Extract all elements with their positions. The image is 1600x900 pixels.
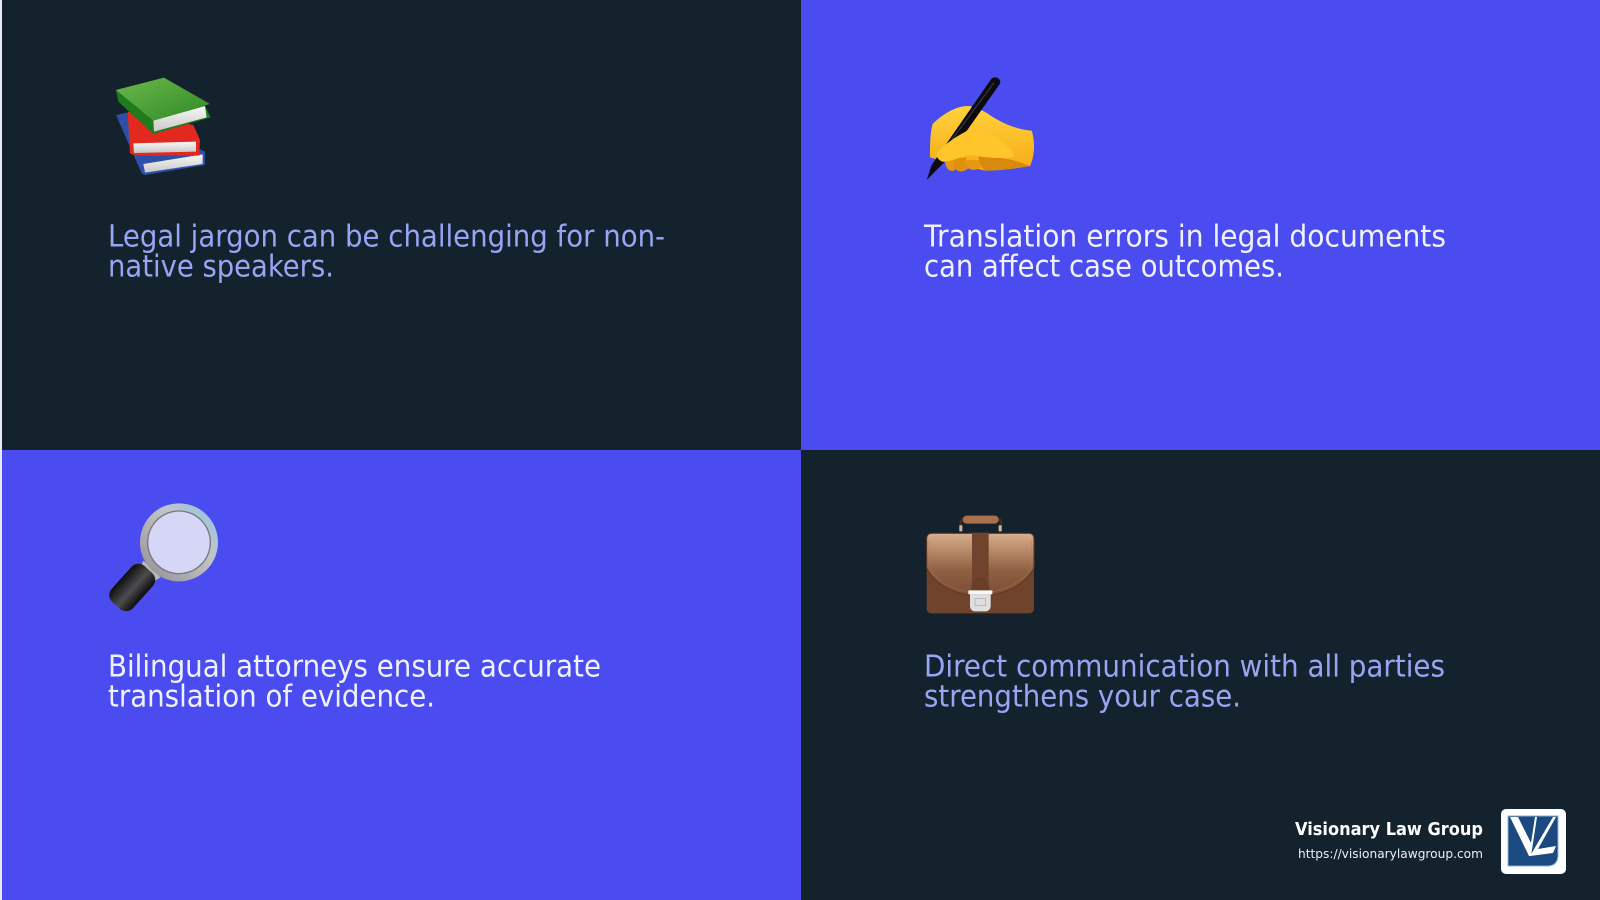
panel: bilingual attorneys: [2, 450, 801, 900]
icon: writing hand: [927, 77, 1034, 180]
left edge strip: [0, 0, 2, 900]
text: bilingual attorneys: [108, 649, 601, 714]
text: legal jargon: native speakers.: [108, 249, 334, 284]
brand name: Visionary Law Group: [1295, 819, 1483, 840]
panel: translation errors: [801, 0, 1600, 450]
text: direct communication: strengthens your case.: [924, 679, 1241, 714]
brand url: https://visionarylawgroup.com: [1298, 846, 1483, 861]
text: legal jargon: [108, 219, 665, 284]
text: translation errors: can affect case outcomes.: [924, 249, 1284, 284]
panel: legal jargon: [2, 0, 801, 450]
text: translation errors: Translation errors in legal documents: [923, 219, 1446, 254]
panel: direct communication: [801, 450, 1600, 900]
icon: briefcase: [927, 516, 1034, 613]
text: translation errors: [923, 219, 1446, 284]
text: bilingual attorneys: translation of evidence.: [108, 679, 435, 714]
text: direct communication: Direct communication with all parties: [924, 649, 1445, 684]
logo: [1501, 809, 1566, 874]
text: direct communication: [924, 649, 1445, 714]
text: legal jargon: Legal jargon can be challenging for non-: [108, 219, 665, 254]
text: bilingual attorneys: Bilingual attorneys ensure accurate: [108, 649, 601, 684]
icon: stack of books: [116, 78, 211, 175]
icon: magnifying glass: [105, 503, 218, 615]
